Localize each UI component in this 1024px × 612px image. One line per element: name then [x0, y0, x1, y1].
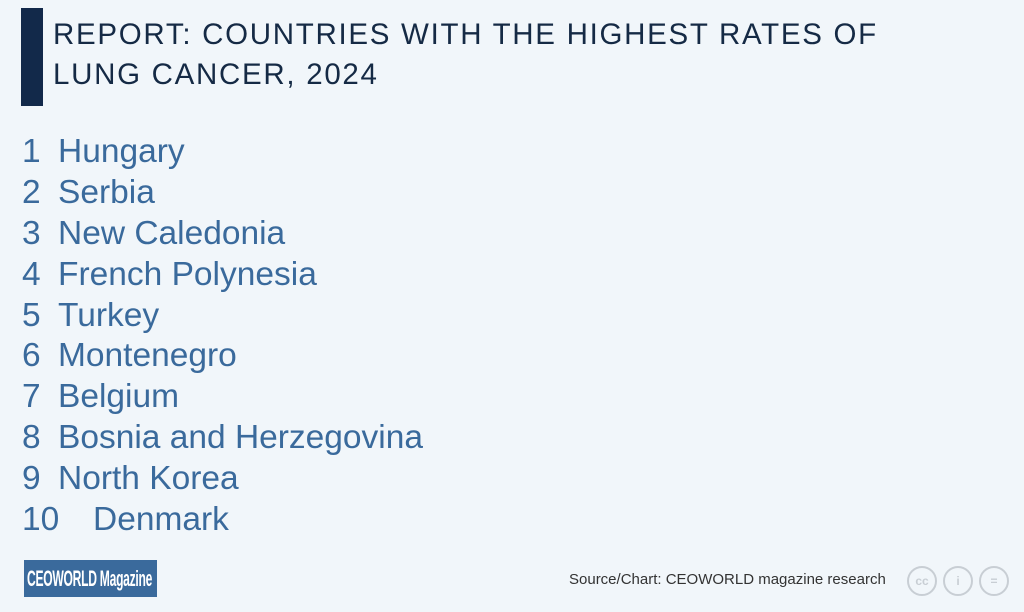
- ranked list: 2: [22, 174, 41, 211]
- ranked list: Hungary: [58, 133, 185, 170]
- ranked list: Bosnia and Herzegovina: [58, 419, 423, 456]
- text: cc: [915, 574, 929, 588]
- ranked list: 3: [22, 215, 41, 252]
- ranked list: French Polynesia: [58, 256, 317, 293]
- ranked list: Serbia: [58, 174, 155, 211]
- ranked list: 6: [22, 337, 41, 374]
- title: [53, 18, 878, 91]
- icons: creative commons: [907, 566, 1009, 596]
- ranked list: Montenegro: [58, 337, 237, 374]
- source text: Source/Chart: CEOWORLD magazine research: [569, 571, 886, 588]
- logo: CEOWORLD Magazine: [27, 566, 152, 591]
- ranked list: 8: [22, 419, 41, 456]
- ranked list: [22, 133, 423, 538]
- title: LUNG CANCER, 2024: [53, 58, 379, 91]
- ranked list: 5: [22, 297, 41, 334]
- title: REPORT: COUNTRIES WITH THE HIGHEST RATES OF: [53, 18, 878, 51]
- text: i: [956, 574, 960, 588]
- title accent bar: [21, 8, 43, 106]
- ranked list: 7: [22, 378, 41, 415]
- ranked list: Turkey: [58, 297, 159, 334]
- logo: [24, 560, 157, 597]
- ranked list: 10: [22, 501, 59, 538]
- ranked list: Denmark: [93, 501, 229, 538]
- ranked list: Belgium: [58, 378, 179, 415]
- ranked list: 1: [22, 133, 41, 170]
- ranked list: 9: [22, 460, 41, 497]
- ranked list: North Korea: [58, 460, 239, 497]
- ranked list: New Caledonia: [58, 215, 285, 252]
- text: =: [990, 574, 998, 588]
- ranked list: 4: [22, 256, 41, 293]
